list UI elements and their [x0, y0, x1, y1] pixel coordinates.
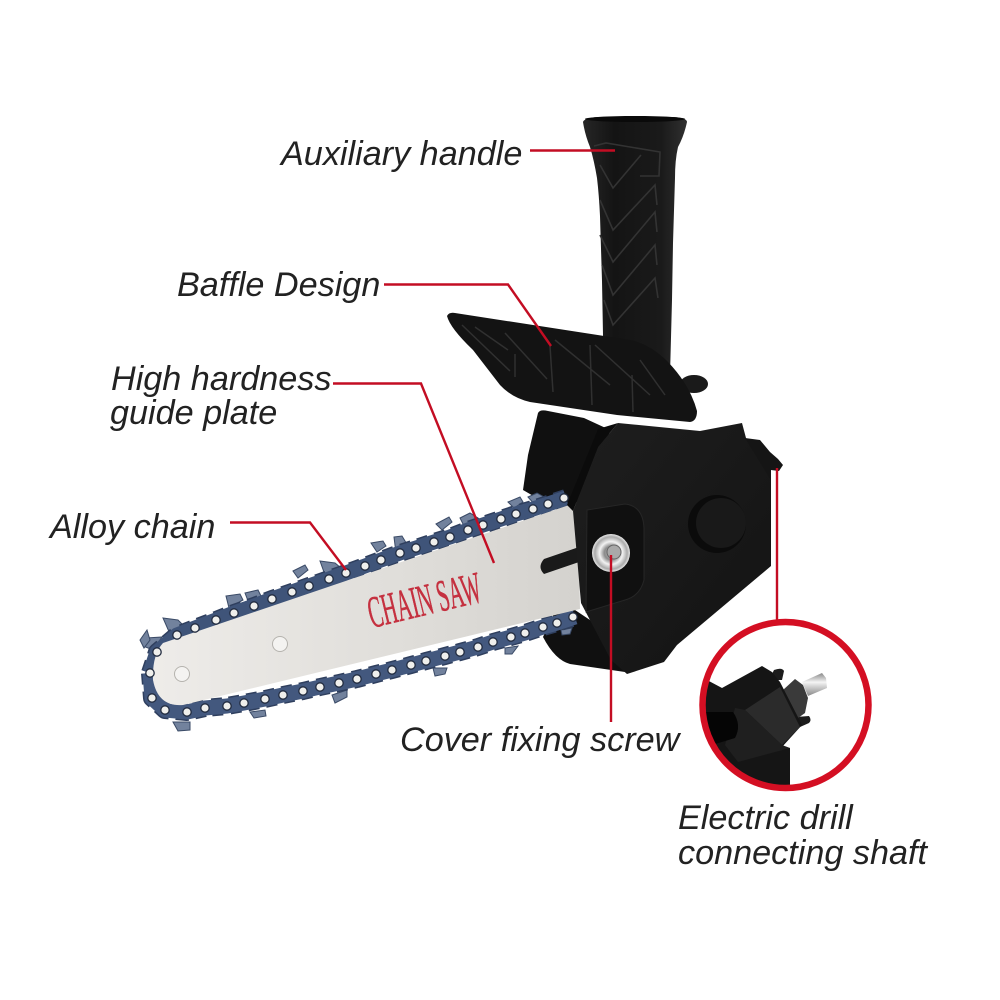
inner screw panel — [586, 504, 644, 612]
label: electric drill connecting shaft: connecting shaft — [678, 834, 928, 872]
handle grip grooves — [594, 143, 660, 325]
round push button — [688, 495, 746, 553]
label: baffle design: Baffle Design — [177, 266, 380, 304]
cover ridge — [567, 423, 618, 511]
label: alloy chain: Alloy chain — [48, 508, 215, 546]
chain links — [150, 498, 566, 673]
main cover plate — [567, 423, 783, 674]
chain saw imprint: CHAIN SAW — [363, 562, 486, 638]
auxiliary handle — [583, 116, 687, 375]
cover fixing screw — [592, 534, 630, 572]
detail circle: drill connecting shaft — [700, 620, 872, 792]
infographic: chainsaw attachment parts diagram — [48, 116, 928, 871]
chain rivets — [146, 494, 577, 716]
lower pin — [798, 716, 810, 727]
callout lines — [230, 150, 777, 722]
rear housing block — [523, 410, 625, 672]
shaft collar — [783, 679, 808, 718]
guide plate slot — [540, 546, 582, 574]
label: electric drill connecting shaft: Electric drill — [678, 799, 853, 837]
silver shaft — [802, 673, 827, 696]
chain cutters — [140, 493, 572, 731]
label: auxiliary handle: Auxiliary handle — [279, 135, 522, 173]
rear connector lug — [745, 438, 783, 480]
guide plate — [153, 502, 582, 705]
guide plate mounting holes — [174, 636, 288, 682]
label: cover fixing screw: Cover fixing screw — [400, 721, 682, 759]
baffle — [447, 313, 697, 422]
baffle ribs — [462, 325, 665, 412]
upper pin — [772, 669, 784, 680]
label: high hardness guide plate: High hardness — [111, 360, 331, 398]
saw chain — [140, 493, 575, 731]
baffle disc under handle — [680, 375, 708, 393]
label: high hardness guide plate: guide plate — [110, 394, 277, 432]
